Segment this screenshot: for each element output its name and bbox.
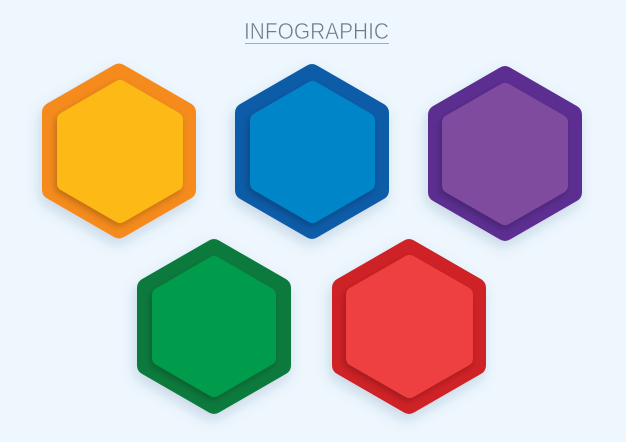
inner hexagon: green: [160, 264, 268, 389]
panel: orange hexagon: [52, 74, 186, 228]
inner hexagon: light red: [354, 263, 465, 390]
inner hexagon: purple: [450, 91, 560, 217]
outer hexagon: dark green: [147, 249, 281, 404]
inner hexagon: blue: [258, 89, 367, 215]
outer hexagon: dark purple: [438, 76, 572, 231]
outer hexagon: dark red: [342, 249, 476, 404]
outer hexagon: orange: [52, 74, 186, 228]
outer hexagon: dark blue: [245, 74, 379, 229]
panel: purple hexagon: [438, 76, 572, 231]
inner hexagon: yellow: [65, 88, 175, 215]
title: INFOGRAPHIC: [244, 18, 389, 44]
panel: green hexagon: [147, 249, 281, 404]
panel: blue hexagon: [245, 74, 379, 229]
panel: red hexagon: [342, 249, 476, 404]
